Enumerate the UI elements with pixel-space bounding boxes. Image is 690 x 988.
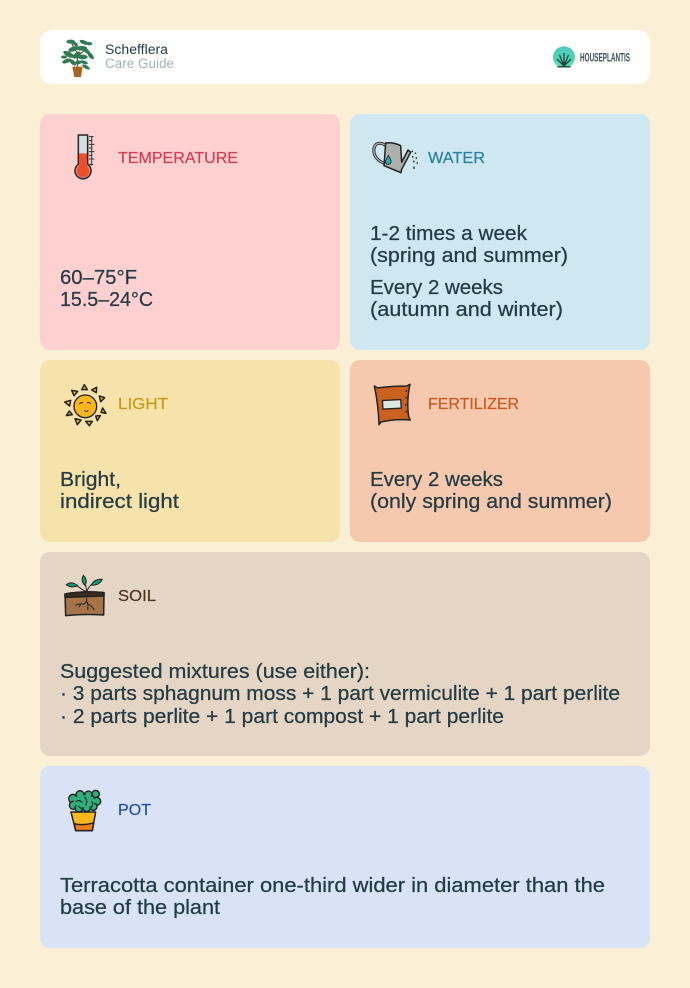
label: fertilizer: FERTILIZER: [428, 396, 519, 413]
title: Care Guide: [105, 56, 174, 71]
label: temperature: TEMPERATURE: [118, 150, 238, 167]
text: suggested mixtures: [60, 660, 620, 728]
panel: water: [350, 114, 650, 350]
text: watering schedule: [370, 222, 568, 321]
text: pot recommendation: Terracotta container one-third wider in diameter than the: [60, 874, 605, 897]
text: temperature range: 15.5–24°C: [60, 288, 153, 311]
icon: soil with sprout: [64, 574, 105, 616]
icon: potted plant: [68, 790, 102, 832]
text: temperature range: [60, 266, 153, 311]
text: watering schedule: Every 2 weeks: [370, 276, 503, 299]
panel: temperature: [40, 114, 340, 350]
panel: light: [40, 360, 340, 542]
icon: sun: [64, 384, 107, 426]
panel: fertilizer: [350, 360, 650, 542]
text: suggested mixtures: · 3 parts sphagnum moss + 1 part vermiculite + 1 part perlite: [60, 682, 620, 705]
label: water: WATER: [428, 150, 485, 167]
text: watering schedule: 1-2 times a week: [370, 222, 528, 245]
text: pot recommendation: [60, 874, 605, 919]
icon: watering can: [372, 142, 418, 174]
text: watering schedule: (autumn and winter): [370, 298, 563, 321]
title: Schefflera: [105, 42, 169, 57]
text: light needs: indirect light: [60, 490, 179, 513]
text: temperature range: 60–75°F: [60, 266, 137, 289]
text: pot recommendation: base of the plant: [60, 896, 220, 919]
header bar: [40, 30, 650, 84]
text: light needs: [60, 468, 179, 513]
icon: schefflera plant: [61, 40, 94, 77]
text: watering schedule: (spring and summer): [370, 244, 568, 267]
icon: fertilizer bag: [374, 384, 412, 426]
text: fertilizer schedule: [370, 468, 612, 513]
label: light: LIGHT: [118, 396, 169, 413]
icon: thermometer: [74, 134, 94, 180]
text: fertilizer schedule: (only spring and summer): [370, 490, 612, 513]
panel: soil: [40, 552, 650, 756]
label: soil: SOIL: [118, 588, 156, 605]
text: fertilizer schedule: Every 2 weeks: [370, 468, 503, 491]
text: suggested mixtures: Suggested mixtures (use either):: [60, 660, 370, 683]
logo: houseplantis: HOUSEPLANTIS: [580, 52, 630, 64]
text: light needs: Bright,: [60, 468, 121, 491]
panel: pot: [40, 766, 650, 948]
text: suggested mixtures: · 2 parts perlite + 1 part compost + 1 part perlite: [60, 705, 504, 728]
logo: houseplantis: [553, 46, 630, 68]
title: [105, 42, 174, 71]
label: pot: POT: [118, 802, 152, 819]
